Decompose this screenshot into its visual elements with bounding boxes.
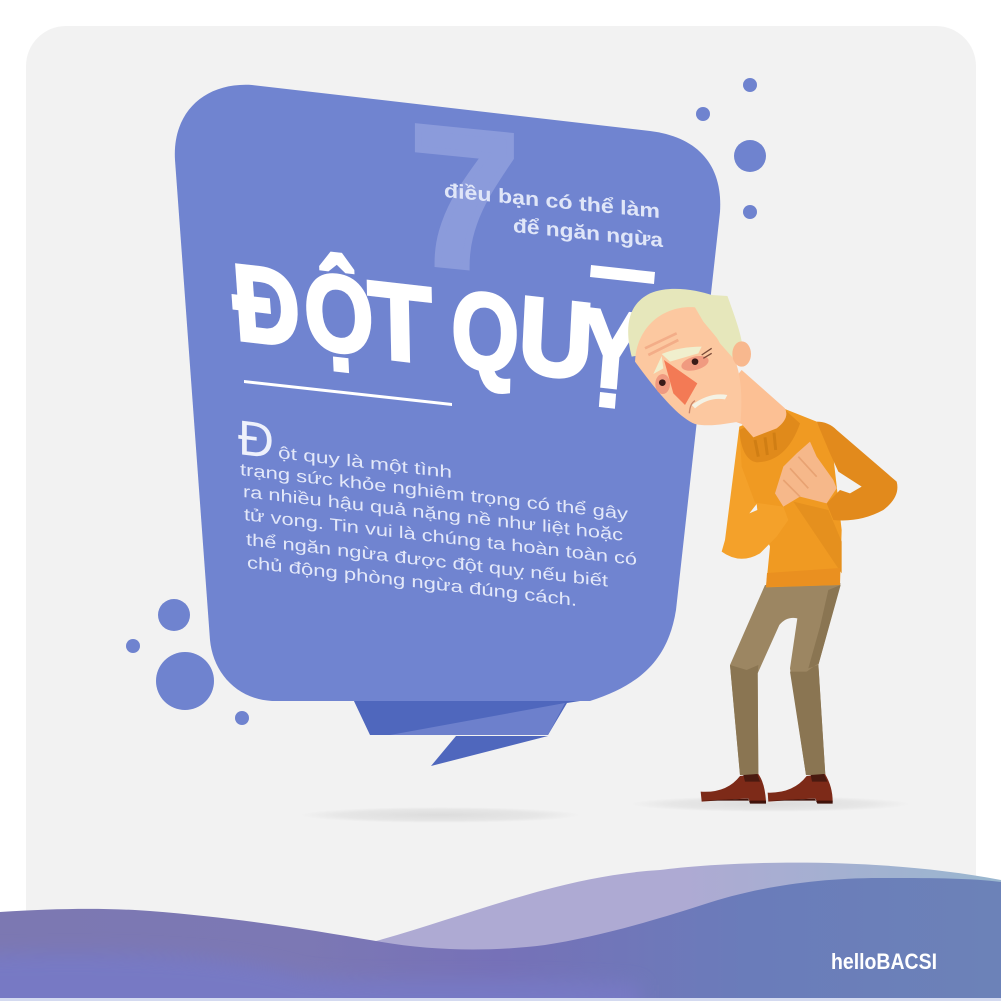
title: Đ: [229, 242, 304, 370]
title: Q: [451, 267, 520, 396]
big number 7: 7: [410, 83, 519, 314]
bottom wave lower shading: [0, 953, 640, 1001]
title accent bar: [590, 265, 655, 284]
body text: trạng sức khỏe nghiêm trọng có thể gây: [240, 460, 629, 524]
man lower body: [701, 583, 841, 804]
body text: thể ngăn ngừa được đột quỵ nếu biết: [246, 530, 608, 591]
title underline: [244, 380, 452, 406]
body text: chủ động phòng ngừa đúng cách.: [247, 553, 577, 610]
decorative dots bottom left: [126, 599, 249, 725]
speech bubble panel: [175, 85, 720, 701]
body text: tử vong. Tin vui là chúng ta hoàn toàn có: [244, 505, 637, 569]
ground shadow under speech bubble: [300, 807, 580, 823]
bottom edge strip: [0, 998, 1001, 1001]
bottom wave back layer: [376, 863, 1001, 990]
body text: [238, 410, 637, 610]
body text: Đ: [238, 410, 274, 469]
man upper body: [628, 289, 897, 587]
subtitle: điều bạn có thể làm: [444, 180, 660, 223]
title: Ộ: [302, 249, 376, 378]
title: Ỵ: [576, 286, 647, 414]
illustration: old man clutching chest: [628, 289, 897, 804]
title: U: [516, 274, 596, 403]
body text: ột quy là một tình: [278, 443, 452, 482]
sweater hem: [766, 568, 840, 587]
logo helloBACSI: helloBACSI: [831, 949, 937, 974]
speech bubble ribbon tail: [353, 699, 593, 766]
ground shadow under man: [630, 796, 910, 812]
body text: ra nhiều hậu quả nặng nề như liệt hoặc: [243, 482, 624, 545]
title: [229, 242, 647, 414]
title: T: [367, 258, 433, 387]
bottom wave front layer: [0, 878, 1001, 998]
decorative dots top right: [696, 78, 766, 219]
subtitle: [444, 180, 664, 252]
subtitle: để ngăn ngừa: [513, 215, 664, 252]
